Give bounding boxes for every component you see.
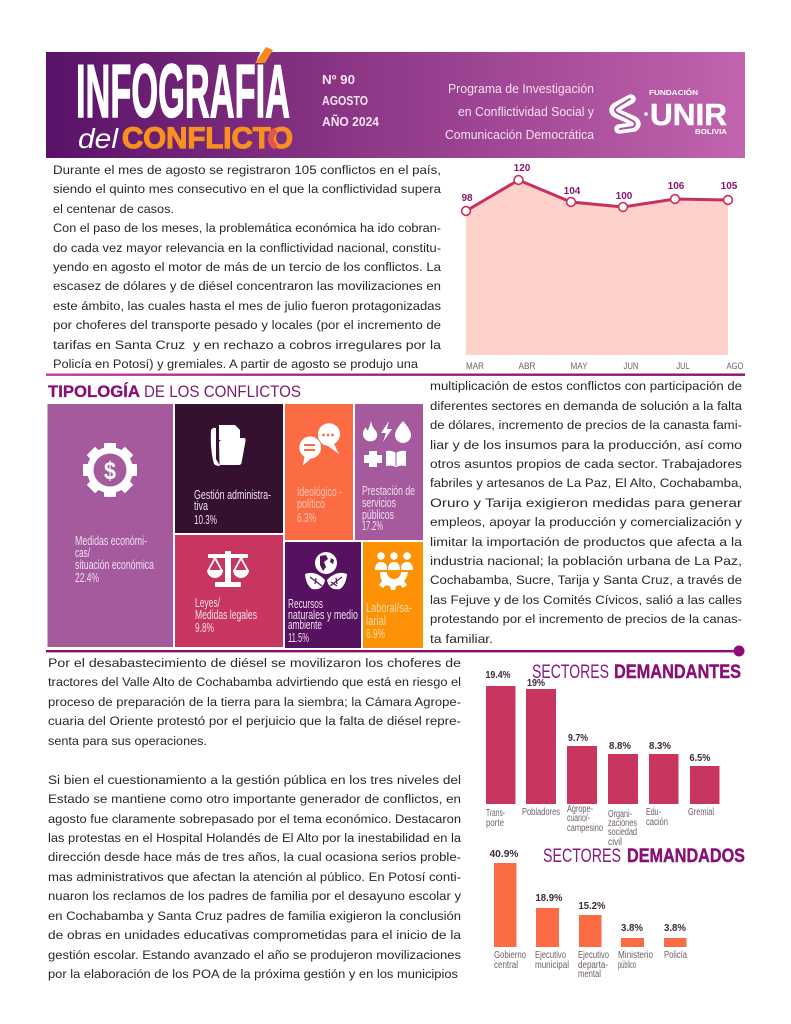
lower left text: senta para sus operaciones. — [48, 734, 207, 748]
line chart: monthly conflicts: MAY — [570, 361, 588, 372]
lower left text: cuaria del Oriente protestó por el perjuicio que la falta de diésel repre- — [48, 714, 461, 728]
issue details: AÑO 2024 — [322, 114, 379, 129]
tile: laboral salarial: 6.9% — [366, 626, 385, 641]
tile: gestión administrativa: Gestión administra- — [194, 487, 271, 502]
logo: Fundación UNIR Bolivia: UNIR — [650, 97, 727, 132]
tile: recursos naturales: ambiente — [288, 617, 322, 632]
lower left text: Estado se mantiene como otro importante generador de conflictos, en — [48, 792, 461, 806]
lower left text: Si bien el cuestionamiento a la gestión pública en los tres niveles del — [48, 773, 461, 787]
bar chart: sectores demandados: 3.8% — [621, 922, 644, 934]
line chart: monthly conflicts: 104 — [564, 186, 581, 197]
intro text — [53, 163, 441, 371]
tile: medidas económicas — [48, 404, 173, 647]
heading: tipología de los conflictos: DE LOS CONFLICTOS — [144, 382, 301, 401]
right column text: diferentes sectores en demanda de solución a la falta — [430, 399, 742, 413]
lower left text: tractores del Valle Alto de Cochabamba advirtiendo que está en riesgo el — [48, 675, 461, 689]
tile: leyes: Leyes/ — [195, 595, 220, 610]
bar chart: sectores demandados: 18.9% — [536, 892, 563, 904]
intro text: el centenar de casos. — [53, 202, 174, 216]
lower left text: proceso de preparación de la tierra para la siembra; la Cámara Agrope- — [48, 695, 461, 709]
tile: ideológico político: Ideológico - — [297, 484, 342, 499]
tile: gestión administrativa: tiva — [194, 498, 209, 513]
line chart: monthly conflicts: 120 — [514, 163, 531, 174]
heading: sectores demandados — [543, 846, 745, 867]
title: Infografía del Conflicto: CONFLICTO — [122, 122, 293, 155]
tile: laboral salarial — [363, 542, 423, 648]
tile: prestación de servicios públicos: públicos — [362, 507, 394, 522]
bar chart: sectores demandantes: cación — [646, 817, 668, 828]
program name: Comunicación Democrática — [445, 128, 594, 142]
heading: sectores demandantes — [532, 662, 741, 683]
tile: prestación de servicios públicos: Prestación de — [362, 483, 415, 498]
bar chart: sectores demandantes: sociedad — [608, 827, 637, 838]
bar chart: sectores demandantes: 6.5% — [690, 752, 711, 764]
logo: Fundación UNIR Bolivia: BOLIVIA — [695, 127, 728, 136]
bar chart: sectores demandantes: 19.4% — [486, 669, 511, 681]
bar chart: sectores demandantes: Edu- — [646, 807, 661, 818]
label: político: político — [297, 496, 325, 511]
heading: tipología de los conflictos — [48, 382, 301, 401]
lower left text — [48, 656, 462, 981]
tile: medidas económicas: 22.4% — [75, 570, 99, 585]
lower left text: por la elaboración de los POA de la próxima gestión y en los municipios — [48, 967, 458, 981]
bar chart: sectores demandantes: 8.3% — [649, 740, 672, 752]
issue details: AGOSTO — [322, 94, 368, 108]
bar chart: sectores demandantes: 9.7% — [568, 732, 589, 744]
bar chart: sectores demandados: central — [494, 960, 518, 971]
line chart: monthly conflicts — [461, 163, 744, 372]
tile: leyes: 9.8% — [195, 620, 214, 635]
tile: prestación de servicios públicos — [355, 404, 423, 540]
tile: medidas económicas: cas/ — [75, 545, 90, 560]
right column text: limitar la importación de productos que afecta a la — [430, 535, 742, 549]
bar chart: sectores demandados: 40.9% — [490, 848, 519, 860]
bar chart: sectores demandados: municipal — [535, 960, 569, 971]
tile: recursos naturales: naturales y medio — [288, 607, 358, 622]
heading: sectores demandados: SECTORES — [543, 846, 621, 867]
tile: leyes — [175, 535, 283, 647]
icon: scales — [207, 551, 249, 587]
tile: laboral salarial: Laboral/sa- — [366, 600, 412, 615]
intro text: escasez de dólares y de diésel concentraron las movilizaciones en — [53, 279, 441, 293]
icon: speech bubbles — [299, 423, 340, 467]
intro text: por choferes del transporte pesado y locales (por el incremento de — [53, 318, 441, 332]
tile: gestión administrativa — [175, 404, 283, 533]
bar chart: sectores demandantes: Organi- — [608, 809, 632, 820]
title: Infografía del Conflicto — [76, 47, 293, 155]
line chart: monthly conflicts: JUL — [676, 361, 690, 372]
right column text: liar y de los insumos para la producción, así como — [430, 438, 742, 452]
treemap: typology of conflicts — [48, 404, 423, 648]
bar chart: sectores demandados: Ministerio — [618, 950, 653, 961]
heading: sectores demandados: DEMANDADOS — [627, 846, 745, 867]
header banner — [46, 47, 745, 158]
lower left text: mas administrativos que afectan la atención al público. En Potosí conti- — [48, 870, 461, 884]
line chart: monthly conflicts: 105 — [721, 181, 738, 192]
right column text: Oruro y Tarija exigieron medidas para generar — [430, 496, 742, 510]
lower left text: de obras en unidades educativas comprometidas para el inicio de la — [48, 928, 461, 942]
heading: sectores demandantes: DEMANDANTES — [614, 662, 741, 683]
line chart: monthly conflicts: 98 — [461, 193, 473, 204]
right column text: ta familiar. — [430, 632, 493, 646]
tile: medidas económicas: situación económica — [75, 557, 155, 572]
line chart: monthly conflicts: 100 — [616, 191, 633, 202]
bar chart: sectores demandantes: civil — [608, 837, 622, 848]
right column text: fabriles y artesanos de La Paz, El Alto, Cochabamba, — [430, 476, 742, 490]
bar chart: sectores demandantes — [486, 669, 720, 848]
tile: prestación de servicios públicos: servicios — [362, 495, 396, 510]
issue details — [322, 73, 379, 129]
bar chart: sectores demandados: Ejecutivo — [578, 950, 609, 961]
intro text: Policía en Potosí) y gremiales. A partir de agosto se produjo una — [53, 357, 418, 371]
line chart: monthly conflicts: MAR — [466, 361, 484, 372]
icon: folder — [211, 425, 246, 466]
bar chart: sectores demandantes: campesino — [567, 823, 603, 834]
lower left text: gestión escolar. Estando avanzado el año se produjeron movilizaciones — [48, 948, 461, 962]
lower left text: en Cochabamba y Santa Cruz padres de familia exigieron la conclusión — [48, 909, 461, 923]
tile: recursos naturales — [285, 542, 361, 648]
right column text: Cochabamba, Sucre, Tarija y Santa Cruz, a través de — [430, 573, 742, 587]
bar chart: sectores demandados: Policía — [664, 950, 687, 961]
lower left text: Por el desabastecimiento de diésel se movilizaron los choferes de — [48, 656, 461, 670]
line chart: monthly conflicts: AGO — [726, 361, 744, 372]
right column text: industria nacional; la población urbana de La Paz, — [430, 554, 742, 568]
issue details: Nº 90 — [322, 73, 355, 87]
lower left text: las protestas en el Hospital Holandés de El Alto por la inestabilidad en la — [48, 831, 461, 845]
bar chart: sectores demandantes: cuario/- — [567, 813, 590, 824]
icon: people and gear — [375, 552, 413, 590]
bar chart: sectores demandantes: 19% — [527, 677, 546, 689]
heading: tipología de los conflictos: TIPOLOGÍA — [48, 382, 140, 401]
bar chart: sectores demandantes: zaciones — [608, 818, 637, 829]
right column text: las Fejuve y de los Comités Cívicos, salió a las calles — [430, 593, 742, 607]
logo: Fundación UNIR Bolivia — [614, 88, 728, 136]
intro text: Con el paso de los meses, la problemática económica ha ido cobran- — [53, 221, 441, 235]
intro text: yendo en agosto el motor de más de un tercio de los conflictos. La — [53, 260, 441, 274]
bar chart: sectores demandados: público — [618, 960, 636, 971]
icon: globe and leaves — [305, 552, 347, 589]
bar chart: sectores demandados: Ejecutivo — [535, 950, 566, 961]
lower left text: agosto fue claramente sobrepasado por el tema económico. Destacaron — [48, 812, 461, 826]
tile: recursos naturales: Recursos — [288, 596, 323, 611]
intro text: siendo el quinto mes consecutivo en el que la conflictividad supera — [53, 182, 441, 196]
intro text: Durante el mes de agosto se registraron 105 conflictos en el país, — [53, 163, 441, 177]
tile: gestión administrativa: 10.3% — [194, 512, 217, 527]
bar chart: sectores demandantes: Gremial — [688, 807, 714, 818]
tile: medidas económicas: Medidas económi- — [75, 533, 147, 548]
right column text — [430, 379, 743, 646]
intro text: do cada vez mayor relevancia en la conflictividad nacional, constitu- — [53, 241, 441, 255]
bar chart: sectores demandados: mental — [578, 969, 601, 980]
section divider with dot — [46, 646, 744, 656]
right column text: protestando por el incremento de precios de la canas- — [430, 612, 742, 626]
bar chart: sectores demandados: Gobierno — [494, 950, 526, 961]
bar chart: sectores demandantes: Agrope- — [567, 804, 593, 815]
tile: recursos naturales: 11.5% — [288, 630, 309, 645]
program name: Programa de Investigación — [448, 82, 594, 96]
bar chart: sectores demandados — [490, 848, 687, 980]
tile: leyes: Medidas legales — [195, 607, 257, 622]
program name: en Conflictividad Social y — [458, 105, 595, 119]
intro text: tarifas en Santa Cruz y en rechazo a cobros irregulares por la — [53, 338, 441, 352]
label: 6.3%: 6.3% — [297, 510, 316, 525]
bar chart: sectores demandantes: porte — [486, 818, 504, 829]
line chart: monthly conflicts: ABR — [518, 361, 536, 372]
bar chart: sectores demandados: 3.8% — [664, 922, 687, 934]
bar chart: sectores demandantes: 8.8% — [609, 740, 632, 752]
bar chart: sectores demandantes: Trans- — [486, 808, 505, 819]
icon: public services — [363, 421, 411, 467]
heading: sectores demandantes: SECTORES — [532, 662, 609, 683]
icon: gear with dollar: $ — [104, 457, 116, 485]
line chart: monthly conflicts: 106 — [668, 181, 685, 192]
bar chart: sectores demandados: 15.2% — [578, 900, 606, 912]
bar chart: sectores demandantes: Pobladores — [522, 807, 560, 818]
icon: gear with dollar — [83, 443, 137, 497]
tile: ideológico político — [285, 404, 353, 540]
lower left text: nuaron los reclamos de los padres de familia por el desayuno escolar y — [48, 889, 462, 903]
bar chart: sectores demandados: departa- — [578, 960, 608, 971]
right column text: multiplicación de estos conflictos con participación de — [430, 379, 742, 393]
title: Infografía del Conflicto: del — [78, 123, 119, 154]
tile: laboral salarial: larial — [366, 613, 386, 628]
right column text: de dólares, incremento de precios de la canasta fami- — [430, 418, 742, 432]
tile: prestación de servicios públicos: 17.2% — [362, 518, 383, 533]
right column text: empleos, apoyar la producción y comercialización y — [430, 515, 743, 529]
line chart: monthly conflicts: JUN — [624, 361, 639, 372]
logo: Fundación UNIR Bolivia: FUNDACIÓN — [649, 88, 698, 97]
right column text: otros asuntos propios de cada sector. Trabajadores — [430, 457, 742, 471]
header banner: INFOGRAFÍA — [76, 49, 290, 133]
lower left text: dirección desde hace más de tres años, la cual ocasiona serios proble- — [48, 850, 461, 864]
program name — [445, 82, 595, 142]
intro text: este ámbito, las cuales hasta el mes de julio fueron protagonizadas — [53, 299, 441, 313]
